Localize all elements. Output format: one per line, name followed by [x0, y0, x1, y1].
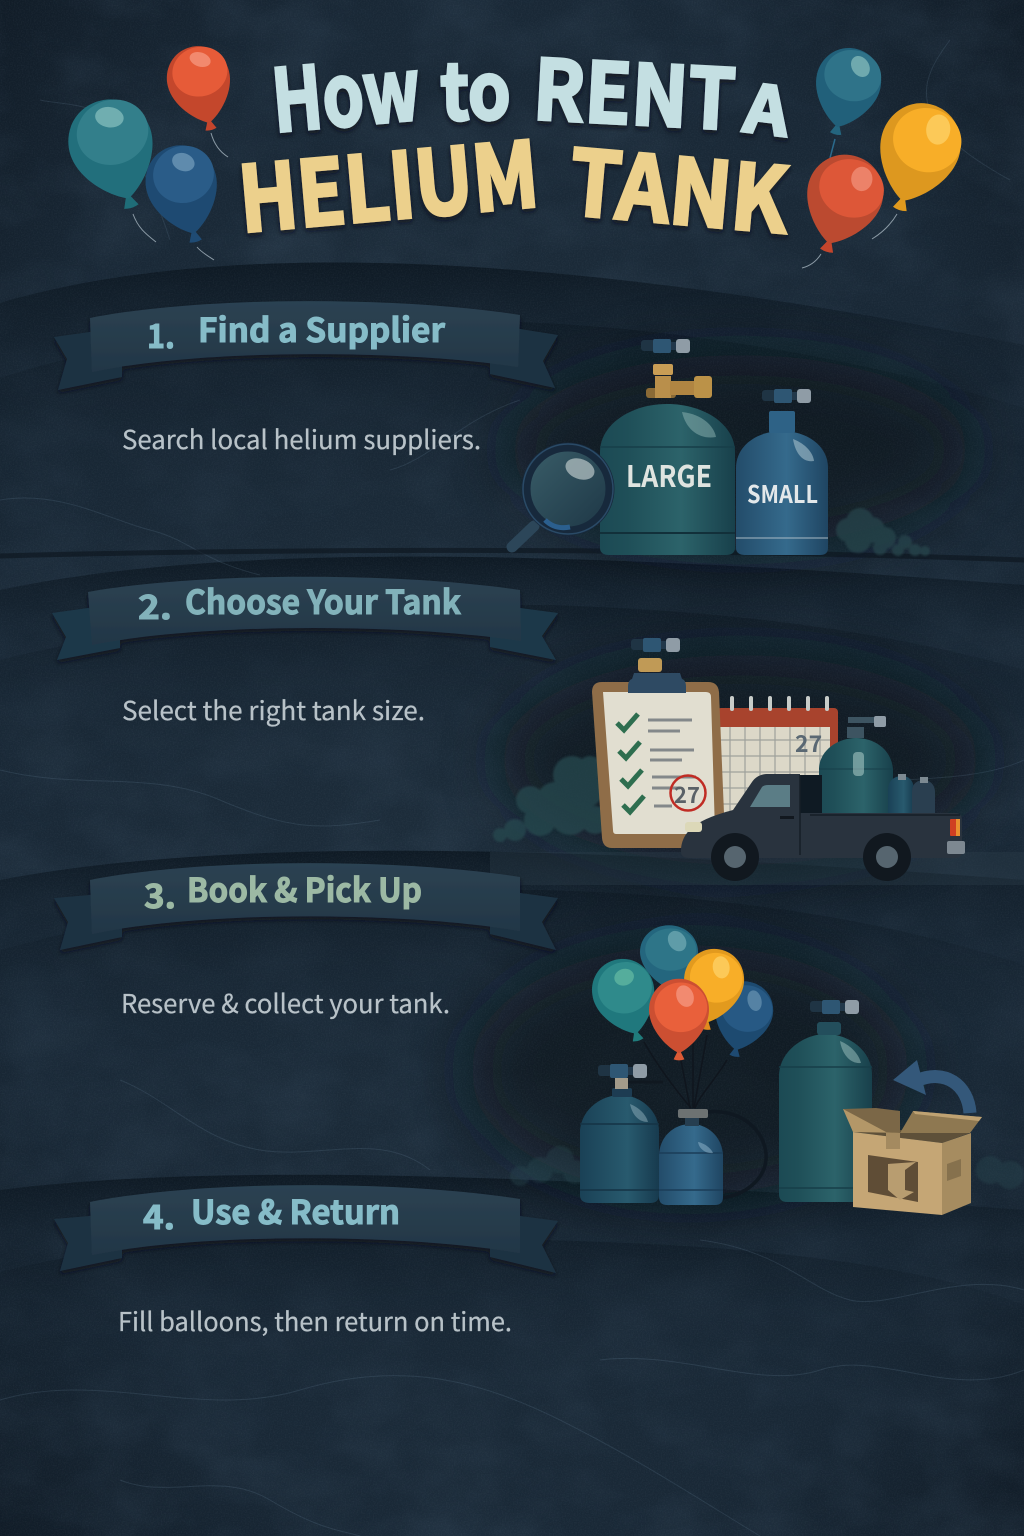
- step 2 heading: 2.: [138, 581, 172, 629]
- title: [233, 19, 796, 259]
- small tank: [736, 389, 828, 555]
- clipboard: 27: [674, 778, 700, 810]
- balloon strings: [644, 1000, 727, 1108]
- step 1 illustration: tanks and magnifier: [0, 339, 1024, 560]
- title line 1: A: [739, 55, 796, 156]
- label: large: LARGE: [626, 452, 712, 496]
- truck tank: [819, 716, 935, 815]
- step 1 heading: Find a Supplier: [198, 304, 446, 352]
- balloon: yellow: [861, 93, 972, 239]
- truck: [681, 774, 965, 881]
- bush: [836, 508, 930, 556]
- title line 1: How: [266, 19, 425, 157]
- balloons left: [57, 40, 242, 260]
- balloon: teal large: [57, 89, 172, 242]
- title line 1: to: [439, 30, 511, 143]
- large tank: [600, 339, 735, 555]
- box: [843, 1108, 982, 1215]
- centre tank: [659, 1109, 723, 1205]
- step 3 heading: Book & Pick Up: [187, 864, 422, 912]
- step 3 heading: 3.: [144, 870, 176, 918]
- dark zones behind illustrations: [470, 355, 980, 1195]
- step 1 heading: 1.: [147, 310, 175, 358]
- step 2 heading: Choose Your Tank: [185, 576, 461, 624]
- step 2 illustration: clipboard, calendar, truck: [490, 638, 1024, 885]
- label: small: SMALL: [747, 475, 818, 510]
- balloon bunch: [584, 925, 779, 1063]
- ground line: [0, 550, 1024, 560]
- balloon: red top: [160, 40, 242, 157]
- title line 2: [233, 102, 795, 259]
- tall tank: [779, 1000, 872, 1202]
- road strip: [490, 852, 1024, 885]
- hose: [707, 1112, 766, 1198]
- calendar: 27: [795, 725, 822, 759]
- balloon: teal right: [804, 41, 888, 158]
- title line 2: TANK: [565, 110, 795, 259]
- magnifier: [512, 444, 613, 547]
- clipboard: [592, 638, 725, 848]
- step 1 text: Search local helium suppliers.: [122, 420, 481, 457]
- calendar: [717, 696, 838, 830]
- title line 2: HELIUM: [233, 102, 543, 258]
- step 3 illustration: balloons, tanks, box: [510, 925, 1024, 1215]
- balloon: blue small: [138, 138, 230, 260]
- step 1 ribbon: [54, 301, 558, 390]
- title line 1: RENT: [531, 23, 739, 154]
- bushes: [510, 1146, 1024, 1189]
- step 4 heading: Use & Return: [191, 1186, 400, 1234]
- step 3 ribbon: [54, 863, 558, 950]
- title line 1: [266, 19, 796, 157]
- balloons right: [790, 41, 972, 268]
- brass fitting: [646, 364, 712, 398]
- step 2 ribbon: [52, 576, 558, 660]
- step 4 heading: 4.: [143, 1191, 175, 1239]
- balloon: red right: [790, 145, 893, 268]
- bush: [493, 756, 609, 842]
- step 4 text: Fill balloons, then return on time.: [118, 1302, 512, 1339]
- step 2 text: Select the right tank size.: [122, 691, 425, 728]
- step 3 text: Reserve & collect your tank.: [121, 984, 450, 1021]
- return arrow: [893, 1060, 970, 1113]
- step 4 ribbon: [54, 1185, 558, 1273]
- left tank: [580, 1064, 663, 1203]
